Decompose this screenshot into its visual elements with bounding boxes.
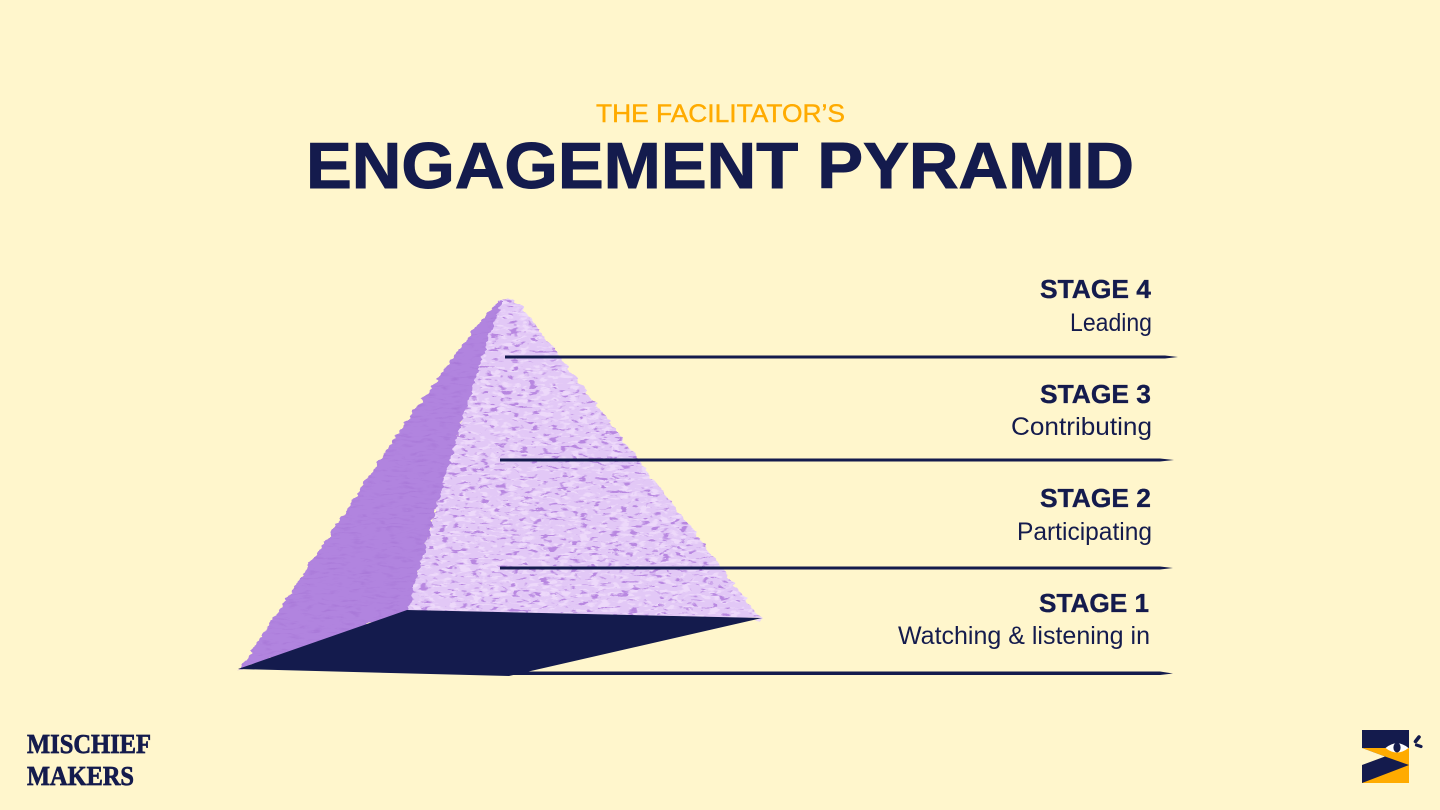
stage lines bbox=[500, 356, 1178, 675]
label: stage 2: STAGE 2 bbox=[1040, 483, 1151, 513]
line: stage 2 bbox=[500, 566, 1173, 570]
pyramid: left face bbox=[238, 301, 503, 671]
pyramid: base bbox=[238, 610, 762, 676]
label: stage 2 bbox=[1017, 483, 1152, 546]
subtitle: THE FACILITATOR’S bbox=[596, 100, 845, 128]
label: stage 1 bbox=[898, 588, 1150, 650]
label: stage 4: Leading bbox=[1070, 309, 1152, 337]
label: stage 3: Contributing bbox=[1011, 413, 1152, 441]
icon: brand logo eye bbox=[1362, 730, 1421, 783]
brand wordmark: MISCHIEF bbox=[27, 729, 151, 759]
label: stage 1: Watching & listening in bbox=[898, 622, 1150, 650]
line: stage 3 bbox=[500, 458, 1174, 462]
label: stage 1: STAGE 1 bbox=[1039, 588, 1149, 618]
label: stage 3: STAGE 3 bbox=[1040, 379, 1151, 409]
label: stage 3 bbox=[1011, 379, 1152, 441]
title: ENGAGEMENT PYRAMID bbox=[306, 129, 1134, 202]
label: stage 4: STAGE 4 bbox=[1040, 274, 1152, 304]
brand wordmark: MAKERS bbox=[27, 761, 134, 791]
brand wordmark bbox=[27, 729, 151, 791]
line: stage 1 bbox=[510, 672, 1173, 675]
pyramid: right face bbox=[405, 297, 762, 620]
line: stage 4 bbox=[505, 356, 1178, 358]
label: stage 2: Participating bbox=[1017, 518, 1152, 546]
label: stage 4 bbox=[1040, 274, 1152, 337]
pyramid bbox=[238, 297, 762, 676]
